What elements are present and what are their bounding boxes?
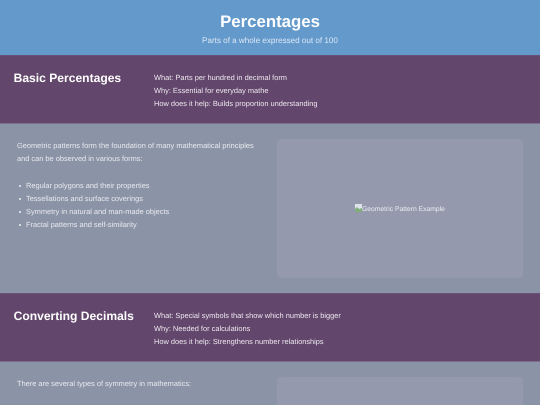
title: Percentages [220, 12, 320, 30]
text: symmetry intro: There are several types of symmetry in mathematics: [17, 379, 191, 388]
info: what why how: How does it help: Strengthens number relationships [154, 337, 324, 346]
panel: converting decimals header [0, 293, 540, 362]
header [0, 0, 540, 56]
info: what why how: How does it help: Builds proportion understanding [154, 99, 317, 108]
image placeholder: geometric pattern [277, 139, 523, 278]
icon: broken image [355, 204, 362, 212]
list: pattern forms: Fractal patterns and self-similarity [26, 220, 137, 229]
list: pattern forms [19, 181, 169, 229]
list: pattern forms: Tessellations and surface coverings [26, 194, 143, 203]
panel: basic percentages header [0, 55, 540, 124]
panel: geometric patterns content [0, 124, 540, 293]
info: what why how: What: Special symbols that show which number is bigger [154, 311, 341, 320]
heading: converting decimals: Converting Decimals [14, 309, 134, 323]
heading: basic percentages: Basic Percentages [14, 71, 121, 85]
text: intro paragraph: and can be observed in various forms: [17, 154, 143, 163]
info: what why how [154, 311, 341, 346]
text: intro paragraph: Geometric patterns form the foundation of many mathematical principles [17, 141, 254, 150]
info: what why how: Why: Essential for everyday mathe [154, 86, 268, 95]
info: what why how [154, 73, 317, 108]
subtitle: Parts of a whole expressed out of 100 [202, 36, 338, 45]
image alt text: Geometric Pattern Example [362, 206, 445, 212]
list: pattern forms: Regular polygons and their properties [26, 181, 150, 190]
info: what why how: What: Parts per hundred in decimal form [154, 73, 287, 82]
text: intro paragraph [17, 141, 254, 163]
panel: symmetry content [0, 362, 540, 405]
image placeholder: symmetry [277, 377, 523, 405]
list: pattern forms: Symmetry in natural and man-made objects [26, 207, 169, 216]
info: what why how: Why: Needed for calculations [154, 324, 250, 333]
